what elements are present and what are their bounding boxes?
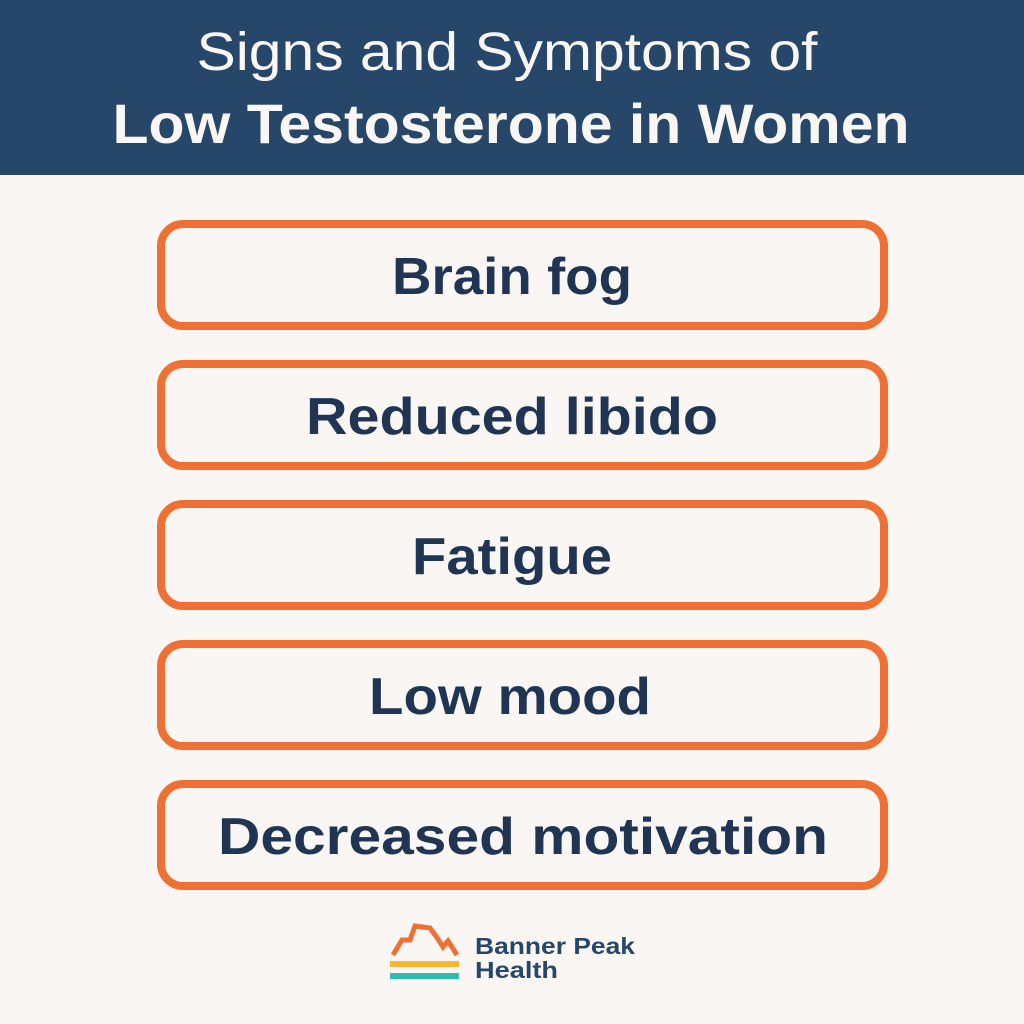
symptom box: Brain fog bbox=[161, 224, 884, 326]
title line 2: Low Testosterone in Women bbox=[112, 92, 910, 155]
symptom box: Brain fog: Brain fog bbox=[392, 248, 632, 306]
symptom box: Low mood bbox=[161, 644, 884, 746]
symptom box: Fatigue: Fatigue bbox=[412, 528, 612, 586]
symptom box: Fatigue bbox=[161, 504, 884, 606]
symptom box: Reduced libido bbox=[161, 364, 884, 466]
symptom box: Decreased motivation bbox=[161, 784, 884, 886]
logo: Banner Peak Health: Health bbox=[475, 957, 558, 983]
logo text: Banner Peak bbox=[475, 933, 635, 959]
header banner bbox=[0, 0, 1024, 175]
icon: mountain bbox=[393, 926, 457, 955]
logo: Banner Peak Health bbox=[390, 926, 635, 983]
symptom box: Reduced libido: Reduced libido bbox=[306, 388, 718, 446]
title line 1: Signs and Symptoms of bbox=[196, 22, 819, 82]
symptom box: Decreased motivation: Decreased motivation bbox=[218, 808, 828, 866]
symptom box: Low mood: Low mood bbox=[369, 668, 651, 726]
